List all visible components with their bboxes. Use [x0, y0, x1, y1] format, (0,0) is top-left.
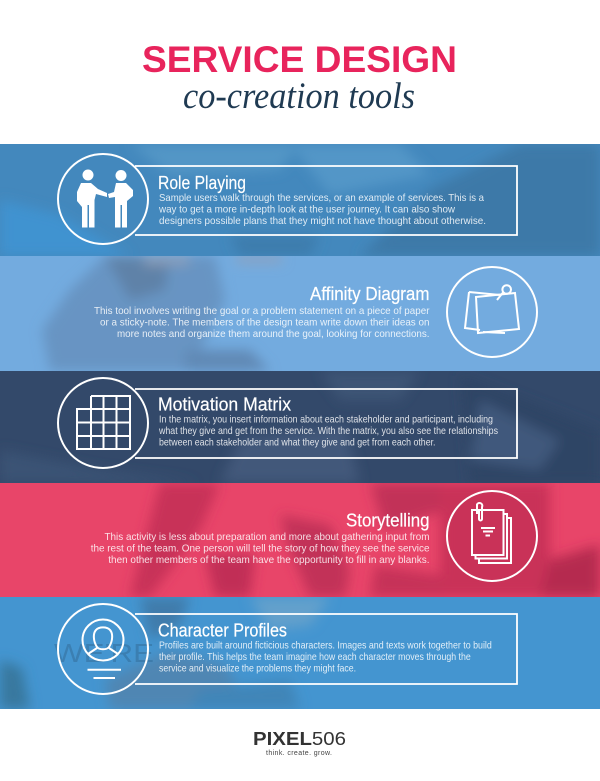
text box: role playing — [135, 166, 517, 235]
panel: storytelling — [0, 483, 600, 597]
panel: motivation matrix — [0, 371, 600, 483]
body text: motivation matrix — [158, 415, 498, 448]
body text: role playing: designers possible plans that they might not have thought about otherwise. — [159, 216, 486, 227]
body text: affinity diagram: This tool involves writing the goal or a problem statement on a piece of paper — [94, 306, 430, 317]
body text: role playing — [158, 193, 486, 227]
body text: storytelling — [91, 532, 430, 566]
body text: role playing: Sample users walk through the services, or an example of services. This is a — [159, 193, 484, 204]
heading: role playing: Role Playing — [158, 173, 246, 193]
body text: character profiles: service and visualize the problems they might face. — [159, 664, 356, 674]
circle and icon: motivation matrix — [58, 378, 148, 468]
body text: storytelling: the rest of the team. One person will tell the story of how they see the service — [91, 544, 430, 554]
logo: pixel506: think. create. grow. — [266, 750, 332, 757]
background lettering: WE'RE — [54, 638, 154, 668]
body text: character profiles — [159, 640, 492, 674]
panel: role playing — [0, 144, 600, 256]
circle and icon: storytelling — [447, 491, 537, 581]
body text: motivation matrix: what they give and get from the service. With the matrix, you also see the relationships — [158, 426, 498, 437]
heading: motivation matrix: Motivation Matrix — [158, 395, 291, 415]
logo: pixel506: PIXEL 506 — [253, 729, 346, 749]
title: SERVICE DESIGN — [142, 38, 457, 80]
heading: affinity diagram: Affinity Diagram — [310, 284, 430, 304]
title — [142, 38, 457, 117]
logo: pixel506 — [253, 729, 346, 757]
body text: role playing: way to get a more in-depth look at the user journey. It can also show — [158, 204, 456, 216]
title: co-creation tools — [183, 76, 415, 117]
body text: storytelling: then other members of the team have the opportunity to fill in any blanks. — [108, 555, 430, 566]
body text: affinity diagram: or a sticky-note. The members of the design team write down their ideas on — [100, 318, 430, 328]
body text: character profiles: their profile. This helps the team imagine how each character moves through the — [159, 652, 471, 663]
circle and icon: role playing — [58, 154, 148, 244]
body text: affinity diagram: more notes and organize them around the goal, looking for connections. — [117, 329, 430, 340]
body text: motivation matrix: between each stakeholder and what they give and get from each other. — [159, 438, 436, 448]
panel: character profiles — [0, 597, 600, 709]
heading: character profiles: Character Profiles — [158, 621, 287, 641]
body text: character profiles: Profiles are built around ficticious characters. Images and texts work together to build — [159, 640, 492, 651]
circle and icon: affinity diagram — [447, 267, 537, 357]
circle and icon: character profiles — [58, 604, 148, 694]
heading: storytelling: Storytelling — [346, 511, 430, 531]
body text: storytelling: This activity is less about preparation and more about gathering input from — [104, 532, 430, 543]
text box: character profiles — [135, 614, 517, 684]
panel: affinity diagram — [0, 256, 600, 371]
body text: motivation matrix: In the matrix, you insert information about each stakeholder and participant, including — [159, 415, 493, 426]
text box: motivation matrix — [135, 389, 517, 458]
body text: affinity diagram — [94, 306, 430, 340]
